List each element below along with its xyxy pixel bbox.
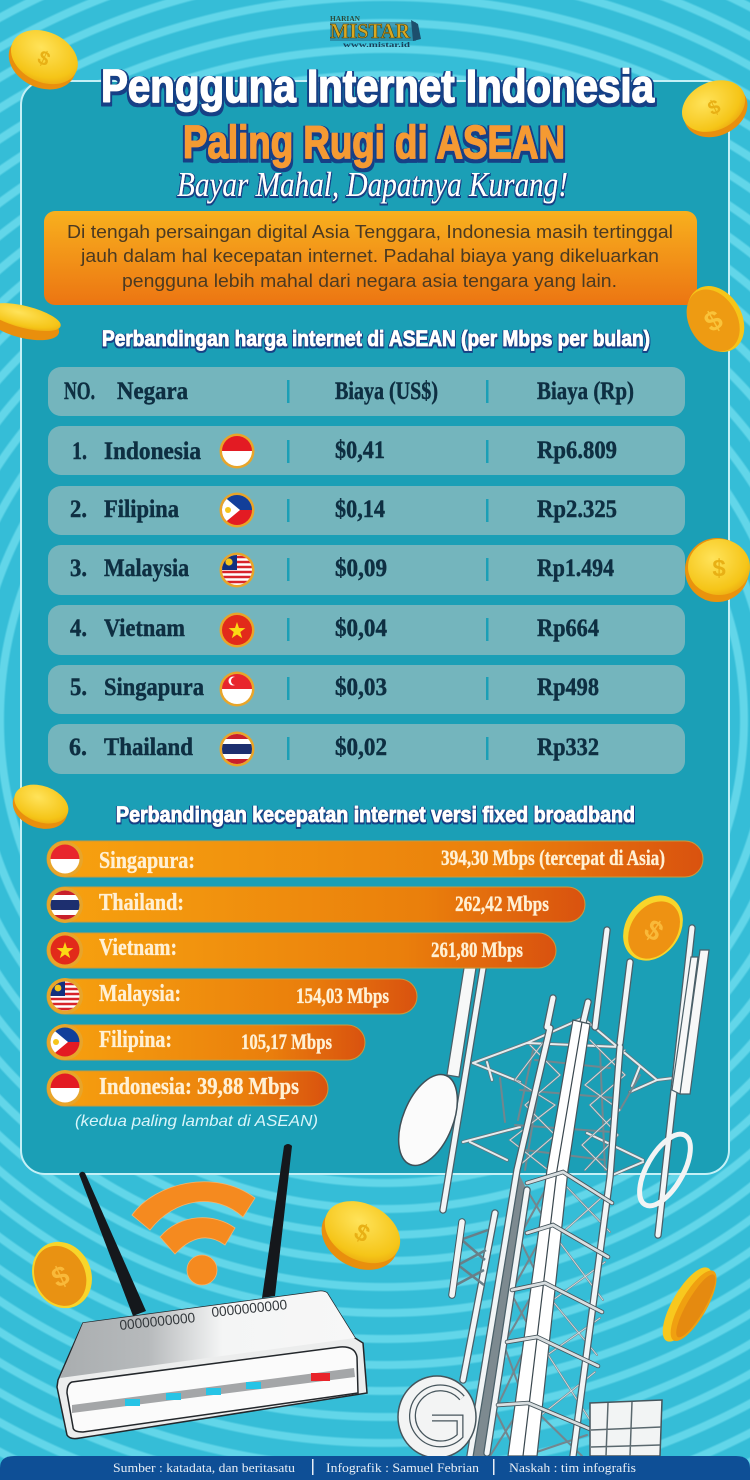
coin: left edge <box>0 297 63 346</box>
bar: Indonesia <box>47 1070 328 1106</box>
row: Vietnam: 4. <box>70 615 87 642</box>
row: Filipina: 2. <box>70 496 87 523</box>
footer bar: Infografik : Samuel Febrian <box>326 1460 480 1475</box>
table header row <box>48 367 685 416</box>
heading: price comparison: Perbandingan harga internet di ASEAN (per Mbps per bulan) <box>102 326 650 351</box>
router front panel <box>67 1347 358 1432</box>
bar: Thailand: Thailand: <box>99 890 184 916</box>
equipment cabinet <box>590 1400 662 1456</box>
row: Filipina: Filipina <box>104 496 179 523</box>
row: Malaysia: Malaysia <box>104 555 189 582</box>
coin: lower left <box>21 1232 103 1318</box>
dish antenna <box>387 1066 469 1174</box>
table header row: NO. <box>64 378 95 405</box>
coin: right upper <box>675 276 750 363</box>
G-shaped dish <box>398 1376 476 1458</box>
row: Indonesia <box>48 426 685 475</box>
bar: Filipina: 105,17 Mbps <box>241 1029 332 1054</box>
price table <box>48 367 685 774</box>
tower left leg cluster <box>468 1170 527 1456</box>
row: Indonesia: $0,41 <box>335 437 385 464</box>
intro callout: pengguna lebih mahal dari negara asia tengara yang lain. <box>122 271 617 291</box>
coin: top right <box>674 70 750 147</box>
illustration: telecom tower <box>387 928 709 1458</box>
row: Malaysia <box>48 545 685 595</box>
router vents <box>119 1296 288 1333</box>
icon: wifi router <box>57 1144 367 1439</box>
coin: above tower: $ <box>639 913 669 948</box>
tower legs and masts <box>443 928 692 1456</box>
intro callout: Di tengah persaingan digital Asia Tenggara, Indonesia masih tertinggal <box>67 222 673 242</box>
footer bar <box>0 1456 750 1480</box>
tower upper platform and lattice <box>463 1018 690 1456</box>
router top surface <box>60 1291 355 1378</box>
row: Vietnam: $0,04 <box>335 615 387 642</box>
row: Indonesia: Indonesia <box>104 438 201 465</box>
row: Filipina: Rp2.325 <box>537 496 617 523</box>
bar: Thailand: 262,42 Mbps <box>455 891 549 916</box>
logo: Harian Mistar: HARIAN <box>330 15 360 23</box>
title line 2: Paling Rugi di ASEAN <box>183 116 565 168</box>
row: Vietnam <box>48 605 685 655</box>
row: Vietnam: Vietnam <box>104 615 185 642</box>
bar: Indonesia: Indonesia: 39,88 Mbps <box>99 1074 299 1100</box>
bar: Singapura: 394,30 Mbps (tercepat di Asia) <box>441 845 665 870</box>
bar: Vietnam: 261,80 Mbps <box>431 937 523 962</box>
coin: left middle <box>7 778 74 836</box>
router lights <box>125 1373 330 1406</box>
note: second slowest in ASEAN: (kedua paling lambat di ASEAN) <box>75 1113 318 1130</box>
router vents: 0000000000 <box>211 1296 288 1320</box>
row: Thailand: Rp332 <box>537 734 599 761</box>
row: Filipina <box>48 486 685 535</box>
row: Filipina: $0,14 <box>335 496 385 523</box>
panel antennas <box>447 968 476 1077</box>
ring antenna <box>629 1126 701 1214</box>
dense lattice bracing <box>490 1040 640 1456</box>
coin: lower right <box>653 1261 725 1350</box>
footer bar: Naskah : tim infografis <box>509 1460 636 1475</box>
coin: lower centre: $ <box>350 1218 375 1249</box>
coin: lower left: $ <box>47 1259 74 1294</box>
row: Vietnam: Rp664 <box>537 615 599 642</box>
coin: top right: $ <box>705 96 724 120</box>
subtitle: Bayar Mahal, Dapatnya Kurang! <box>177 165 568 204</box>
router body <box>57 1291 367 1439</box>
coin: above tower <box>611 884 695 972</box>
bar: Vietnam: Vietnam: <box>99 935 177 961</box>
router vents: 0000000000 <box>119 1309 196 1333</box>
table header row: Biaya (US$) <box>335 378 438 405</box>
intro callout: jauh dalam hal kecepatan internet. Padahal biaya yang dikeluarkan <box>80 246 659 266</box>
bar: Filipina: Filipina: <box>99 1027 172 1053</box>
bar: Malaysia: Malaysia: <box>99 981 181 1007</box>
main teal panel <box>21 81 729 1174</box>
logo: Harian Mistar <box>330 15 421 49</box>
bar: Singapura: Singapura: <box>99 848 195 874</box>
tower collars <box>498 1172 612 1429</box>
coin: right middle: $ <box>712 555 726 582</box>
bar: Filipina <box>47 1024 365 1060</box>
bar: Singapura <box>47 841 703 877</box>
footer bar: Sumber : katadata, dan beritasatu <box>113 1460 296 1475</box>
row: Singapura: Rp498 <box>537 674 599 701</box>
coin: right upper: $ <box>699 303 728 338</box>
row: Malaysia: 3. <box>70 555 87 582</box>
heading: speed comparison: Perbandingan kecepatan internet versi fixed broadband <box>116 802 635 827</box>
coin: top left <box>0 20 87 100</box>
coin: right middle <box>685 538 750 602</box>
row: Indonesia: Rp6.809 <box>537 437 617 464</box>
bar: Malaysia: 154,03 Mbps <box>296 983 389 1008</box>
row: Malaysia: $0,09 <box>335 555 387 582</box>
logo: Harian Mistar: MISTAR <box>330 19 411 43</box>
coin: lower centre <box>310 1189 411 1283</box>
row: Thailand: Thailand <box>104 734 193 761</box>
row: Thailand <box>48 724 685 774</box>
table header row: Biaya (Rp) <box>537 378 634 405</box>
row: Singapura <box>48 665 685 714</box>
icon: wifi signal <box>132 1182 255 1285</box>
bar: Thailand <box>47 887 585 923</box>
row: Singapura: $0,03 <box>335 674 387 701</box>
coin: top left: $ <box>34 47 53 71</box>
bar: Malaysia <box>47 978 417 1014</box>
row: Singapura: Singapura <box>104 674 204 701</box>
table header row: Negara <box>117 378 188 405</box>
row: Thailand: $0,02 <box>335 734 387 761</box>
intro callout <box>44 211 697 305</box>
row: Malaysia: Rp1.494 <box>537 555 614 582</box>
row: Singapura: 5. <box>70 674 87 701</box>
row: Indonesia: 1. <box>72 438 87 465</box>
title line 1: Pengguna Internet Indonesia <box>101 60 654 112</box>
speed bar chart <box>47 841 703 1106</box>
router antennas <box>79 1172 146 1316</box>
bar: Vietnam <box>47 932 556 968</box>
logo: Harian Mistar: www.mistar.id <box>343 41 410 49</box>
row: Thailand: 6. <box>69 734 87 761</box>
small side antenna <box>452 1222 488 1295</box>
tower central mast <box>508 1020 590 1456</box>
